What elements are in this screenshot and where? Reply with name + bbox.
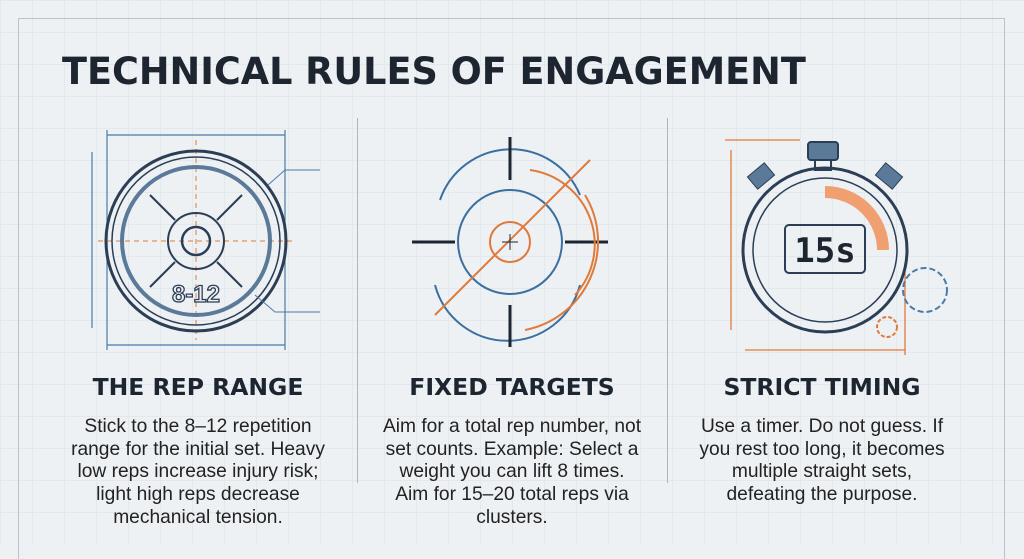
icon: stopwatch (725, 139, 948, 355)
icon: target (412, 137, 608, 347)
icon: weight plate (91, 130, 320, 350)
column: fixed targets: Aim for a total rep number, not (383, 416, 641, 437)
column: strict timing (699, 373, 945, 505)
column: fixed targets (383, 373, 641, 528)
title: TECHNICAL RULES OF ENGAGEMENT (62, 50, 806, 93)
column: rep range: range for the initial set. Heavy (71, 439, 325, 460)
column: strict timing: STRICT TIMING (723, 373, 921, 401)
icon: stopwatch: 15s (794, 231, 856, 271)
column: rep range: THE REP RANGE (93, 373, 303, 401)
column: fixed targets: set counts. Example: Select a (386, 439, 638, 460)
column: strict timing: you rest too long, it becomes (699, 439, 945, 460)
column: fixed targets: clusters. (476, 507, 548, 528)
column: fixed targets: FIXED TARGETS (409, 373, 615, 401)
icon: weight plate: 8-12 (172, 281, 220, 308)
column: rep range: light high reps decrease (96, 484, 300, 505)
column: rep range: low reps increase injury risk; (78, 461, 318, 482)
column: rep range (71, 373, 325, 528)
column: rep range: Stick to the 8–12 repetition (84, 416, 312, 437)
column: rep range: mechanical tension. (113, 507, 283, 528)
column: strict timing: multiple straight sets, (732, 461, 912, 482)
column: strict timing: defeating the purpose. (727, 484, 917, 505)
column: strict timing: Use a timer. Do not guess. If (701, 416, 943, 437)
column: fixed targets: Aim for 15–20 total reps via (395, 484, 629, 505)
column: fixed targets: weight you can lift 8 times. (399, 461, 625, 482)
